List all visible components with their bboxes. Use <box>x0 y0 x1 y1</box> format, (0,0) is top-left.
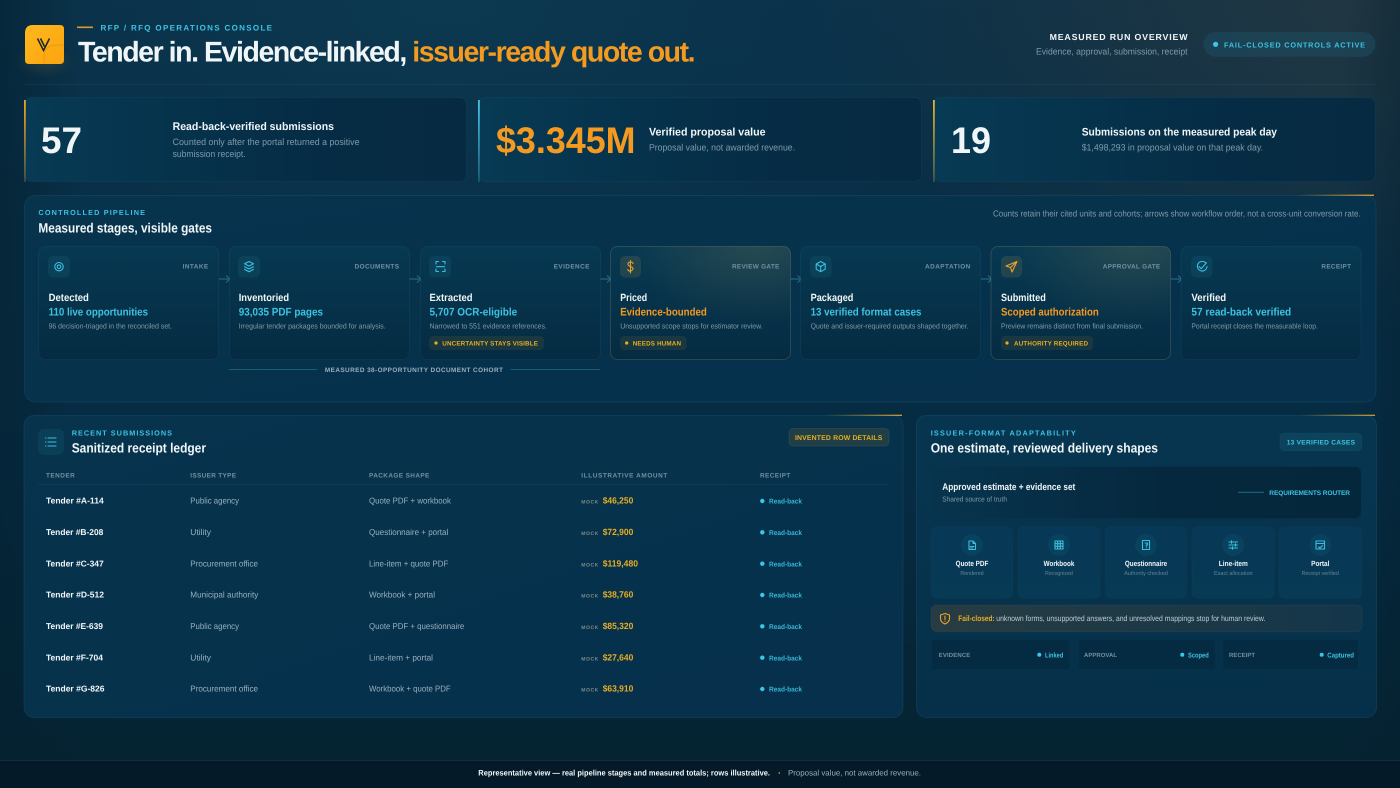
row B-208: Questionnaire + portal <box>369 527 448 537</box>
format: workbook: Recognized <box>1045 570 1073 577</box>
chip: authority required: AUTHORITY REQUIRED <box>1014 340 1088 347</box>
status: approval: APPROVAL <box>1084 652 1117 659</box>
panel: KPI proposal value: Proposal value, not awarded revenue. <box>649 143 795 153</box>
panel: KPI peak day: Submissions on the measured peak day <box>1082 127 1278 139</box>
row C-347: Read-back <box>769 560 802 568</box>
stage: priced gate: Unsupported scope stops for estimator review. <box>620 322 763 331</box>
chip: authority required <box>1001 336 1093 350</box>
pipeline heading: Measured stages, visible gates <box>38 220 212 235</box>
format: questionnaire: Authority checked <box>1124 570 1168 577</box>
row G-826: Procurement office <box>190 684 258 694</box>
eyebrow: RFP / RFQ OPERATIONS CONSOLE <box>100 24 273 32</box>
stage: extracted <box>420 246 600 360</box>
stage: submitted gate: Preview remains distinct from final submission. <box>1001 322 1143 331</box>
row G-826 <box>46 684 802 694</box>
table header <box>38 473 889 485</box>
row G-826: Workbook + quote PDF <box>369 684 451 694</box>
stage: packaged <box>800 246 980 360</box>
table header: RECEIPT <box>760 473 790 480</box>
row C-347: $119,480 <box>603 558 638 568</box>
stage: inventoried: DOCUMENTS <box>355 263 400 270</box>
row B-208: MOCK <box>581 531 599 537</box>
row C-347: Tender #C-347 <box>46 558 104 568</box>
stage: submitted gate: Scoped authorization <box>1001 307 1099 319</box>
stage: submitted gate: Submitted <box>1001 292 1046 304</box>
panel: controlled pipeline <box>24 195 1376 402</box>
shared source box <box>931 467 1361 518</box>
stage: submitted gate: APPROVAL GATE <box>1103 263 1161 270</box>
stage: inventoried: Inventoried <box>239 292 289 304</box>
row F-704: Utility <box>190 652 212 662</box>
fail-closed callout <box>931 605 1362 632</box>
shared source box: REQUIREMENTS ROUTER <box>1269 490 1350 497</box>
row B-208 <box>46 527 802 537</box>
adaptability heading <box>931 428 1158 456</box>
stage: verified: 57 read-back verified <box>1191 307 1291 319</box>
table header: ILLUSTRATIVE AMOUNT <box>581 473 667 480</box>
panel: KPI peak day: $1,498,293 in proposal value on that peak day. <box>1082 143 1263 153</box>
format: quote pdf: Rendered <box>960 570 984 577</box>
panel: receipt ledger <box>24 415 903 718</box>
arrow <box>981 276 992 282</box>
format: workbook <box>1018 527 1100 598</box>
row E-639: Public agency <box>190 621 240 631</box>
shared source box: Approved estimate + evidence set <box>942 482 1076 493</box>
row C-347: MOCK <box>581 562 599 568</box>
table header: ISSUER TYPE <box>190 473 237 480</box>
stage: extracted: 5,707 OCR-eligible <box>430 307 517 319</box>
panel: KPI peak day <box>933 98 1376 182</box>
row C-347: Procurement office <box>190 558 258 568</box>
run overview: MEASURED RUN OVERVIEW <box>1050 32 1188 42</box>
ledger heading: RECENT SUBMISSIONS <box>72 428 172 437</box>
format: line-item: Exact allocation <box>1214 570 1253 577</box>
format: line-item: Line-item <box>1219 559 1248 568</box>
stage: extracted: Extracted <box>430 292 472 304</box>
status: receipt: Captured <box>1327 651 1354 659</box>
row D-512: MOCK <box>581 594 599 600</box>
row F-704: MOCK <box>581 656 599 662</box>
title: Tender in. Evidence-linked, issuer-ready quote out. <box>78 37 696 69</box>
row A-114: $46,250 <box>603 496 633 506</box>
row E-639: Tender #E-639 <box>46 621 103 631</box>
status pill <box>1204 32 1376 57</box>
row B-208: Utility <box>190 527 212 537</box>
panel: KPI proposal value: $3.345M <box>496 120 636 161</box>
status: evidence: EVIDENCE <box>939 652 970 659</box>
row B-208: Read-back <box>769 529 802 537</box>
icon: brand logo <box>15 25 75 78</box>
status: receipt <box>1223 640 1358 669</box>
status: receipt: RECEIPT <box>1229 652 1255 659</box>
stage: submitted gate <box>991 246 1170 360</box>
pipeline note: Counts retain their cited units and cohorts; arrows show workflow order, not a cross-unit conversion rate. <box>993 208 1361 218</box>
panel: KPI verified submissions: submission receipt. <box>173 149 246 159</box>
pipeline heading <box>38 208 212 235</box>
row B-208: $72,900 <box>603 527 633 537</box>
pipeline heading: CONTROLLED PIPELINE <box>38 208 145 217</box>
row G-826: Tender #G-826 <box>46 684 105 694</box>
row G-826: MOCK <box>581 688 599 694</box>
arrow <box>1171 276 1182 282</box>
row A-114: Public agency <box>190 496 240 506</box>
chip: verified cases <box>1280 433 1362 451</box>
stage: detected: INTAKE <box>183 263 209 270</box>
stage: detected: 110 live opportunities <box>49 307 148 319</box>
table header: PACKAGE SHAPE <box>369 473 430 480</box>
row C-347 <box>46 558 802 568</box>
fail-closed callout: Fail-closed: <box>958 614 995 623</box>
format: portal <box>1279 527 1362 598</box>
row D-512: Workbook + portal <box>369 590 435 600</box>
format: portal: Portal <box>1311 559 1329 568</box>
arrow <box>410 276 421 282</box>
status: approval <box>1079 640 1215 669</box>
ledger heading <box>72 428 207 456</box>
panel: KPI peak day: 19 <box>951 120 991 161</box>
row E-639 <box>46 621 802 631</box>
footer: Proposal value, not awarded revenue. <box>788 768 921 777</box>
row B-208: Tender #B-208 <box>46 527 104 537</box>
stage: inventoried: Irregular tender packages bounded for analysis. <box>239 322 386 331</box>
stage: extracted: Narrowed to 551 evidence references. <box>430 322 547 331</box>
stage: detected <box>38 246 218 360</box>
chip: needs human <box>620 336 687 350</box>
chip: uncertainty <box>429 336 544 350</box>
chip: uncertainty: UNCERTAINTY STAYS VISIBLE <box>442 340 538 347</box>
stage: verified: Verified <box>1191 292 1226 304</box>
status: evidence: Linked <box>1045 651 1063 659</box>
row D-512: Tender #D-512 <box>46 590 104 600</box>
run overview <box>1036 32 1188 56</box>
format: workbook: Workbook <box>1044 559 1075 568</box>
stage: verified: RECEIPT <box>1321 263 1351 270</box>
row D-512: $38,760 <box>603 590 633 600</box>
stage: packaged: Packaged <box>811 292 853 304</box>
status: evidence <box>932 640 1069 669</box>
row F-704 <box>46 652 802 662</box>
row E-639: MOCK <box>581 625 599 631</box>
format: portal: Receipt verified <box>1302 570 1339 577</box>
stage: inventoried: 93,035 PDF pages <box>239 307 323 319</box>
panel: KPI verified submissions <box>24 98 466 182</box>
stage: packaged: ADAPTATION <box>925 263 971 270</box>
stage: detected: Detected <box>49 292 89 304</box>
fail-closed callout: unknown forms, unsupported answers, and unresolved mappings stop for human review. <box>996 614 1265 623</box>
shared source box: Shared source of truth <box>942 495 1007 504</box>
arrow <box>219 276 230 282</box>
stage: packaged: Quote and issuer-required outputs shaped together. <box>811 322 969 331</box>
run overview: Evidence, approval, submission, receipt <box>1036 46 1188 56</box>
row F-704: Tender #F-704 <box>46 652 103 662</box>
chip: invented rows <box>789 428 889 446</box>
header <box>15 24 1376 78</box>
stage: priced gate: Priced <box>620 292 647 304</box>
ledger heading: Sanitized receipt ledger <box>72 441 207 456</box>
arrow <box>600 276 611 282</box>
adaptability heading: ISSUER-FORMAT ADAPTABILITY <box>931 428 1076 437</box>
stage: priced gate: REVIEW GATE <box>732 263 780 270</box>
row E-639: Read-back <box>769 623 802 631</box>
format: quote pdf: Quote PDF <box>956 559 989 568</box>
row E-639: $85,320 <box>603 621 633 631</box>
panel: KPI verified submissions: Counted only after the portal returned a positive <box>173 137 360 147</box>
row D-512: Municipal authority <box>190 590 259 600</box>
stage: priced gate: Evidence-bounded <box>620 307 707 319</box>
status: approval: Scoped <box>1188 651 1209 659</box>
row A-114: Tender #A-114 <box>46 496 104 506</box>
panel: KPI verified submissions: 57 <box>41 120 82 161</box>
footer <box>0 760 1400 788</box>
row F-704: $27,640 <box>603 652 633 662</box>
row C-347: Line-item + quote PDF <box>369 558 448 568</box>
stage: extracted: EVIDENCE <box>554 263 590 270</box>
stage: detected: 96 decision-triaged in the reconciled set. <box>49 322 172 331</box>
footer: Representative view — real pipeline stages and measured totals; rows illustrative. <box>478 768 770 777</box>
stage: verified: Portal receipt closes the measurable loop. <box>1191 322 1318 331</box>
adaptability heading: One estimate, reviewed delivery shapes <box>931 441 1158 456</box>
panel: KPI proposal value <box>478 98 922 182</box>
table header: TENDER <box>46 473 75 480</box>
stage: priced gate <box>610 246 790 360</box>
row A-114 <box>46 496 802 506</box>
row G-826: $63,910 <box>603 684 633 694</box>
panel: KPI verified submissions: Read-back-verified submissions <box>173 121 334 133</box>
format: questionnaire: Questionnaire <box>1125 559 1167 568</box>
stage: inventoried <box>230 246 410 360</box>
arrow <box>790 276 802 282</box>
row A-114: MOCK <box>581 500 599 506</box>
row D-512: Read-back <box>769 592 802 600</box>
panel: issuer-format adaptability <box>916 415 1376 718</box>
format: line-item <box>1192 527 1274 598</box>
stage: packaged: 13 verified format cases <box>811 307 921 319</box>
row E-639: Quote PDF + questionnaire <box>369 621 464 631</box>
row F-704: Line-item + portal <box>369 652 433 662</box>
icon: list <box>38 429 64 455</box>
chip: needs human: NEEDS HUMAN <box>633 340 681 347</box>
panel: KPI proposal value: Verified proposal value <box>649 127 766 139</box>
format: questionnaire <box>1105 527 1187 598</box>
stage: verified <box>1181 246 1361 360</box>
status pill: FAIL-CLOSED CONTROLS ACTIVE <box>1224 40 1365 50</box>
cohort bracket: MEASURED 38-OPPORTUNITY DOCUMENT COHORT <box>325 367 503 374</box>
chip: verified cases: 13 VERIFIED CASES <box>1287 440 1356 446</box>
row A-114: Read-back <box>769 498 802 506</box>
row F-704: Read-back <box>769 654 802 662</box>
chip: invented rows: INVENTED ROW DETAILS <box>795 435 883 442</box>
row G-826: Read-back <box>769 686 802 694</box>
row A-114: Quote PDF + workbook <box>369 496 452 506</box>
format: quote pdf <box>931 527 1013 598</box>
row D-512 <box>46 590 802 600</box>
